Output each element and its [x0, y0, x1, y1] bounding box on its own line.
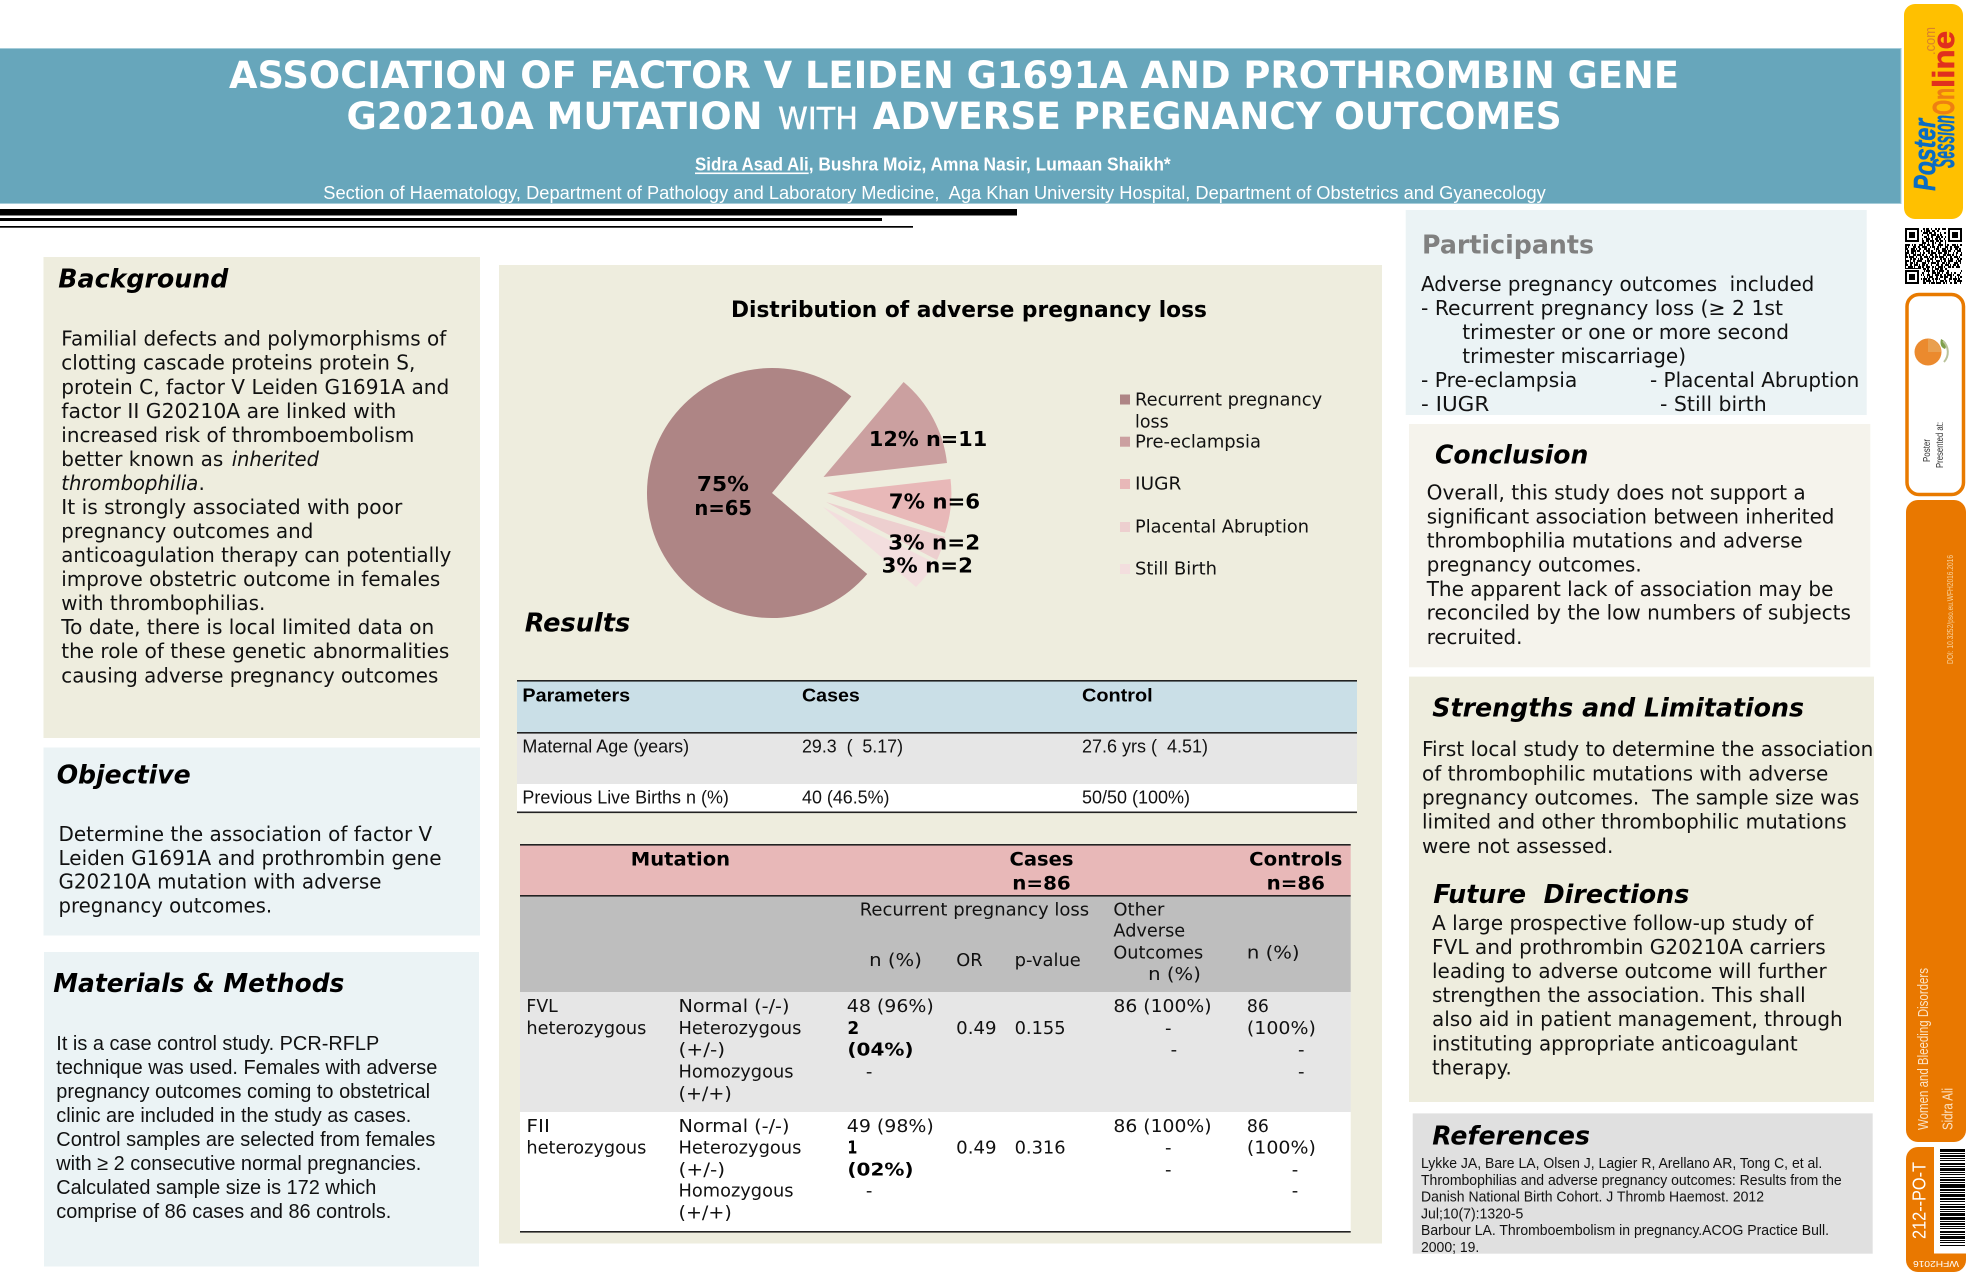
table: mutation results: [520, 844, 1351, 1233]
table row: FVL: [526, 996, 1316, 1104]
orange category bar: DOI: 10.3252/pso.eu.WFH2016.2016: [1946, 555, 1955, 664]
background text: improve obstetric outcome in females: [61, 567, 440, 591]
table sub-header row: OR: [956, 950, 983, 971]
background text: inherited: [232, 447, 319, 471]
table row: FVL: (+/+): [678, 1083, 732, 1104]
participants text: - Pre-eclampsia: [1421, 368, 1577, 392]
title: WITH: [778, 102, 858, 137]
strengths text: of thrombophilic mutations with adverse: [1422, 762, 1828, 786]
materials and methods text: clinic are included in the study as cases.: [56, 1105, 411, 1127]
panel: participants: [1406, 210, 1867, 416]
background text: It is strongly associated with poor: [61, 495, 403, 519]
panel: objective: [44, 748, 480, 936]
objective text: G20210A mutation with adverse: [58, 870, 382, 894]
table row: FVL: -: [1171, 1039, 1177, 1060]
table row: FVL: FVL: [526, 996, 558, 1017]
heading: materials and methods: Materials & Methods: [53, 969, 344, 999]
background text: thrombophilia: [61, 471, 198, 495]
table sub-header row: Recurrent pregnancy loss: [860, 899, 1089, 920]
heading: background: Background: [58, 265, 229, 295]
table row: FII: -: [1165, 1159, 1172, 1180]
table row: FII: heterozygous: [526, 1137, 646, 1158]
objective text: [58, 822, 442, 918]
table row: FII: 86: [1247, 1116, 1269, 1137]
objective text: pregnancy outcomes.: [58, 894, 272, 918]
pie labels: 12% n=11: [869, 427, 987, 451]
participants text: trimester or one or more second: [1462, 320, 1789, 344]
table row: FVL: Homozygous: [678, 1061, 794, 1082]
future directions text: instituting appropriate anticoagulant: [1432, 1031, 1798, 1055]
poster id tab with barcode: [1906, 1147, 1967, 1272]
materials and methods text: Control samples are selected from females: [56, 1129, 435, 1151]
title: G20210A MUTATION: [346, 95, 762, 138]
background text: protein C, factor V Leiden G1691A and: [61, 375, 449, 399]
table row: FVL: -: [866, 1061, 872, 1082]
future directions text: FVL and prothrombin G20210A carriers: [1432, 935, 1826, 959]
materials and methods text: with ≥ 2 consecutive normal pregnancies.: [55, 1153, 421, 1175]
table row: FVL: Normal (-/-): [678, 996, 790, 1017]
title: [229, 54, 1679, 138]
references text: 2000; 19.: [1421, 1240, 1479, 1256]
table sub-header row: p-value: [1015, 950, 1081, 971]
sidebar logo: PosterSessionOnline: line: [1926, 31, 1961, 88]
materials and methods text: Calculated sample size is 172 which: [56, 1177, 376, 1199]
table header row: n=86: [1267, 872, 1325, 894]
heading: results: Results: [525, 609, 630, 639]
pie labels: 75%: [697, 472, 749, 496]
heading: participants: Participants: [1422, 230, 1594, 260]
presented-at box: Presented at:: [1934, 422, 1946, 468]
future directions text: strengthen the association. This shall: [1432, 983, 1806, 1007]
materials and methods text: [55, 1033, 437, 1223]
heading: future directions: Future Directions: [1433, 880, 1689, 910]
sidebar logo: PosterSessionOnline: .com: [1922, 27, 1939, 55]
table sub-header row: Outcomes: [1113, 942, 1203, 963]
references text: Jul;10(7):1320-5: [1421, 1206, 1523, 1222]
table: participant characteristics: 50/50 (100%): [1082, 787, 1190, 807]
pie labels: 3% n=2: [888, 530, 980, 554]
table sub-header row: [860, 899, 1300, 985]
table row: FII: Heterozygous: [678, 1137, 801, 1158]
background text: the role of these genetic abnormalities: [61, 639, 449, 663]
table row: FII: -: [1165, 1137, 1172, 1158]
pie legend: loss: [1135, 411, 1169, 432]
future directions text: therapy.: [1432, 1055, 1512, 1079]
background text: increased risk of thromboembolism: [61, 423, 414, 447]
table row: FVL: heterozygous: [526, 1018, 646, 1039]
table row: FVL: -: [1298, 1061, 1304, 1082]
participants text: - Still birth: [1660, 392, 1767, 416]
panel: strengths and future directions: [1409, 677, 1874, 1102]
table: participant characteristics: 29.3 ( 5.17): [802, 737, 903, 757]
references text: Lykke JA, Bare LA, Olsen J, Lagier R, Arellano AR, Tong C, et al.: [1421, 1156, 1822, 1172]
icon: congress logo: [1914, 338, 1948, 366]
table row: FII: 49 (98%): [847, 1116, 934, 1137]
participants text: trimester miscarriage): [1462, 344, 1686, 368]
table header row: [631, 848, 1342, 894]
participants text: - IUGR: [1421, 392, 1489, 416]
strengths text: First local study to determine the association: [1422, 737, 1873, 761]
table row: FII: -: [1292, 1181, 1298, 1202]
table row: FVL: (100%): [1247, 1018, 1316, 1039]
participants text: [1421, 272, 1859, 416]
pie legend: Still Birth: [1135, 559, 1217, 580]
authors: Sidra Asad Ali: [695, 154, 809, 174]
table row: FII: -: [1292, 1159, 1298, 1180]
table row: FII: 0.49: [956, 1137, 997, 1158]
strengths text: were not assessed.: [1422, 834, 1613, 858]
table row: FVL: 0.49: [956, 1018, 997, 1039]
table row: FII: (02%): [847, 1159, 914, 1180]
table sub-header row: n (%): [869, 950, 922, 971]
background text: causing adverse pregnancy outcomes: [61, 663, 438, 687]
participants text: - Placental Abruption: [1650, 368, 1859, 392]
background text: with thrombophilias.: [61, 591, 265, 615]
table row: FVL: 86 (100%): [1113, 996, 1212, 1017]
references text: [1421, 1156, 1842, 1256]
references text: Danish National Birth Cohort. J Thromb Haemost. 2012: [1421, 1190, 1764, 1206]
table: participant characteristics: Parameters: [522, 686, 630, 706]
conclusion text: thrombophilia mutations and adverse: [1427, 529, 1803, 553]
panel: references: [1413, 1113, 1873, 1256]
panel: results: [499, 265, 1382, 1244]
background text: anticoagulation therapy can potentially: [61, 543, 451, 567]
materials and methods text: It is a case control study. PCR-RFLP: [56, 1033, 379, 1055]
materials and methods text: pregnancy outcomes coming to obstetrical: [56, 1081, 430, 1103]
table: participant characteristics: Maternal Age (years): [522, 737, 689, 757]
sidebar logo: PosterSessionOnline: Poster: [1907, 117, 1942, 191]
sidebar logo: PosterSessionOnline: [1904, 4, 1963, 219]
conclusion text: reconciled by the low numbers of subjects: [1427, 601, 1851, 625]
background text: factor II G20210A are linked with: [61, 399, 396, 423]
table sub-header row: Other: [1113, 899, 1165, 920]
orange category bar: Sidra Ali: [1940, 1088, 1957, 1130]
QR code: [1905, 228, 1962, 285]
pie labels: [694, 427, 987, 578]
sidebar logo: PosterSessionOnline: Session: [1926, 115, 1961, 168]
table header row: n=86: [1012, 872, 1071, 894]
affiliation: Section of Haematology, Department of Pathology and Laboratory Medicine, Aga Khan University Hospital, Department of Obstetrics and Gyanecology: [323, 183, 1546, 203]
pie labels: 3% n=2: [882, 554, 973, 578]
table sub-header row: n (%): [1247, 942, 1300, 963]
table row: FII: [526, 1116, 1316, 1224]
strengths text: [1422, 737, 1873, 858]
heading: conclusion: Conclusion: [1435, 440, 1588, 470]
table row: FVL: (+/-): [678, 1039, 725, 1060]
panel: background: [44, 257, 480, 738]
poster id tab with barcode: WFH2016: [1912, 1259, 1959, 1268]
orange category bar: [1906, 500, 1966, 1142]
table row: FVL: Heterozygous: [678, 1018, 801, 1039]
table row: FVL: 2: [847, 1018, 859, 1039]
table: participant characteristics: Control: [1082, 686, 1153, 706]
pie labels: n=65: [694, 496, 752, 520]
future directions text: [1432, 911, 1843, 1079]
background text: pregnancy outcomes and: [61, 519, 313, 543]
authors: , Bushra Moiz, Amna Nasir, Lumaan Shaikh*: [809, 154, 1171, 174]
table row: FII: (+/-): [678, 1159, 725, 1180]
header banner: [0, 48, 1901, 204]
table row: FII: Homozygous: [678, 1181, 794, 1202]
background text: [60, 327, 451, 687]
strengths text: pregnancy outcomes. The sample size was: [1422, 786, 1859, 810]
background text: Familial defects and polymorphisms of: [61, 327, 447, 351]
poster id tab with barcode: 212--PO-T: [1910, 1162, 1930, 1239]
table row: FII: 1: [847, 1137, 857, 1158]
future directions text: A large prospective follow-up study of: [1432, 911, 1814, 935]
future directions text: leading to adverse outcome will further: [1432, 959, 1827, 983]
table row: FII: FII: [526, 1116, 550, 1137]
table: participant characteristics: [517, 680, 1357, 813]
conclusion text: recruited.: [1427, 625, 1522, 649]
table row: FVL: 48 (96%): [847, 996, 934, 1017]
presented-at box: Poster: [1921, 439, 1933, 462]
table row: FVL: -: [1165, 1018, 1172, 1039]
future directions text: also aid in patient management, through: [1432, 1007, 1843, 1031]
table: participant characteristics: Previous Live Births n (%): [522, 787, 729, 807]
table sub-header row: n (%): [1148, 964, 1201, 985]
pie legend: IUGR: [1135, 473, 1181, 494]
panel: materials and methods: [44, 952, 479, 1266]
heading: references: References: [1432, 1122, 1590, 1152]
background text: To date, there is local limited data on: [60, 615, 434, 639]
presented-at box: [1907, 294, 1964, 494]
table row: FII: Normal (-/-): [678, 1116, 790, 1137]
table row: FII: 86 (100%): [1113, 1116, 1212, 1137]
background text: better known as: [61, 447, 223, 471]
table row: FVL: 86: [1247, 996, 1269, 1017]
participants text: - Recurrent pregnancy loss (≥ 2 1st: [1421, 296, 1783, 320]
table header row: Mutation: [631, 848, 730, 870]
references text: Thrombophilias and adverse pregnancy outcomes: Results from the: [1421, 1173, 1842, 1189]
table row: FVL: 0.155: [1015, 1018, 1066, 1039]
materials and methods text: comprise of 86 cases and 86 controls.: [56, 1201, 391, 1223]
background text: .: [198, 471, 205, 495]
pie chart: [647, 368, 987, 618]
table row: FII: (+/+): [678, 1203, 732, 1224]
objective text: Determine the association of factor V: [58, 822, 433, 846]
pie legend: Placental Abruption: [1135, 517, 1309, 538]
table row: FII: 0.316: [1015, 1137, 1066, 1158]
table row: FVL: -: [1298, 1039, 1304, 1060]
sidebar logo: PosterSessionOnline: On: [1926, 88, 1961, 115]
objective text: Leiden G1691A and prothrombin gene: [58, 846, 442, 870]
strengths text: limited and other thrombophilic mutations: [1422, 810, 1847, 834]
conclusion text: The apparent lack of association may be: [1426, 577, 1833, 601]
table: participant characteristics: 27.6 yrs ( 4.51): [1082, 737, 1208, 757]
table header row: Controls: [1249, 848, 1342, 870]
pie labels: 7% n=6: [889, 489, 980, 513]
materials and methods text: technique was used. Females with adverse: [56, 1057, 437, 1079]
heading: strengths and limitations: Strengths and Limitations: [1432, 693, 1804, 723]
orange category bar: Women and Bleeding Disorders: [1915, 968, 1932, 1130]
conclusion text: [1426, 480, 1851, 649]
pie legend: [1120, 390, 1323, 580]
pie legend: Pre-eclampsia: [1135, 431, 1261, 452]
table: participant characteristics: 40 (46.5%): [802, 787, 890, 807]
table row: FII: (100%): [1247, 1137, 1316, 1158]
table sub-header row: Adverse: [1113, 921, 1185, 942]
heading: objective: Objective: [57, 760, 191, 790]
participants text: Adverse pregnancy outcomes included: [1421, 272, 1814, 296]
conclusion text: significant association between inherited: [1427, 504, 1834, 528]
table row: FII: -: [866, 1181, 872, 1202]
table row: FVL: (04%): [847, 1039, 914, 1060]
pie legend: Recurrent pregnancy: [1135, 390, 1323, 411]
background text: clotting cascade proteins protein S,: [61, 351, 415, 375]
table: participant characteristics: Cases: [802, 686, 860, 706]
panel: conclusion: [1409, 424, 1870, 667]
chart title: Distribution of adverse pregnancy loss: [731, 298, 1207, 323]
table header row: Cases: [1010, 848, 1074, 870]
title: ADVERSE PREGNANCY OUTCOMES: [873, 95, 1562, 138]
conclusion text: Overall, this study does not support a: [1427, 480, 1806, 504]
references text: Barbour LA. Thromboembolism in pregnancy.ACOG Practice Bull.: [1421, 1223, 1829, 1239]
title: ASSOCIATION OF FACTOR V LEIDEN G1691A AND PROTHROMBIN GENE: [229, 54, 1679, 97]
barcode: [1940, 1149, 1965, 1247]
conclusion text: pregnancy outcomes.: [1427, 553, 1642, 577]
